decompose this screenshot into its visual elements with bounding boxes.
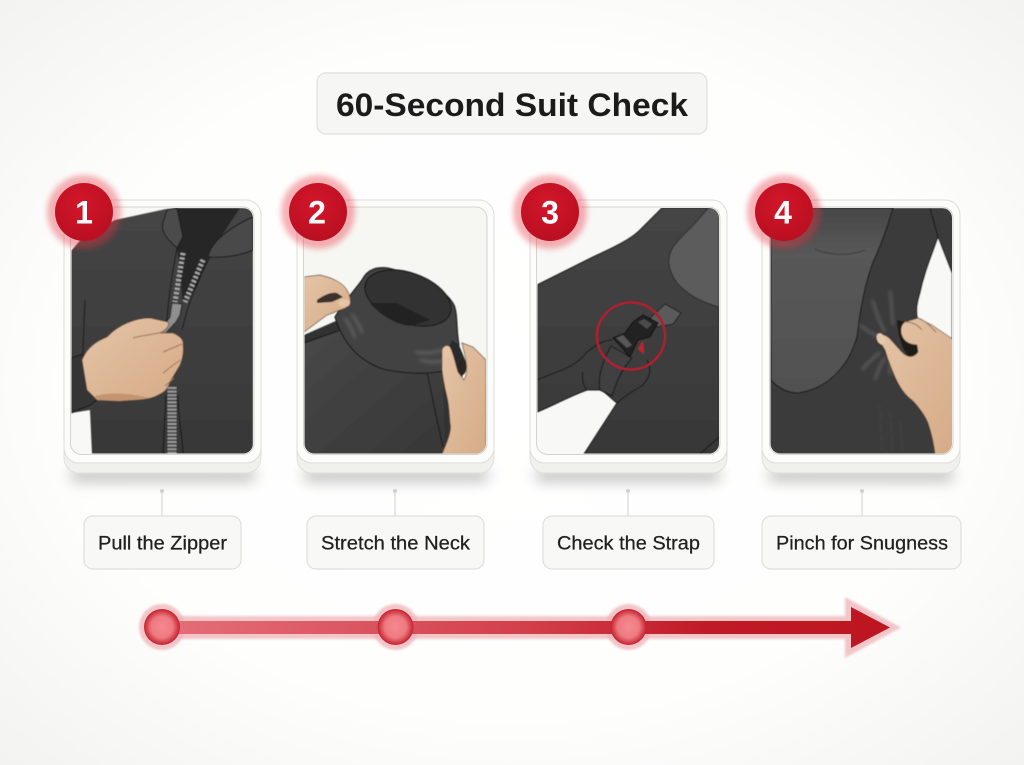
left hand	[304, 275, 350, 332]
pinched fold	[897, 320, 918, 356]
progress arrow	[139, 597, 901, 658]
illustration: jacket and zipper	[71, 208, 253, 454]
panel: step 1 pull the zipper	[64, 200, 261, 482]
strap end tab	[650, 304, 681, 327]
title	[317, 73, 707, 134]
hand pinching	[879, 318, 954, 454]
badge 2	[281, 175, 355, 249]
illustration: torso pinch and hand	[770, 208, 954, 454]
label: pull the zipper: Pull the Zipper	[98, 534, 228, 554]
label: check the strap: Check the Strap	[557, 534, 700, 554]
badge 1: 1	[75, 194, 93, 230]
badge 2: 2	[308, 194, 326, 230]
badge 1	[47, 175, 121, 249]
strap	[599, 346, 632, 396]
icon: zipper slider	[162, 302, 182, 334]
node 1	[144, 609, 180, 645]
fabric pulled by right hand	[450, 340, 466, 378]
hand pulling zipper	[82, 318, 183, 401]
badge 4	[747, 175, 821, 249]
badge 3: 3	[541, 194, 559, 230]
panel: step 2 stretch the neck	[297, 200, 494, 482]
node 3	[610, 609, 646, 645]
label: check the strap	[543, 489, 714, 569]
icon: red arrow marker	[638, 341, 644, 354]
node 2	[378, 609, 414, 645]
badge 4: 4	[774, 194, 792, 230]
icon: buckle	[613, 315, 658, 357]
right hand	[442, 343, 486, 454]
label: pull the zipper	[84, 489, 241, 569]
illustration: neck collar and hands	[304, 259, 486, 454]
panel: step 3 check the strap	[530, 200, 727, 482]
label: pinch for snugness: Pinch for Snugness	[776, 534, 948, 554]
highlight circle	[597, 302, 665, 370]
panel: step 4 pinch for snugness	[762, 200, 960, 482]
illustration: crotch strap and buckle	[537, 208, 719, 454]
label: pinch for snugness	[762, 489, 961, 569]
title: 60-Second Suit Check	[336, 87, 689, 123]
label: stretch the neck	[307, 489, 484, 569]
label: stretch the neck: Stretch the Neck	[321, 534, 471, 554]
badge 3	[513, 175, 587, 249]
